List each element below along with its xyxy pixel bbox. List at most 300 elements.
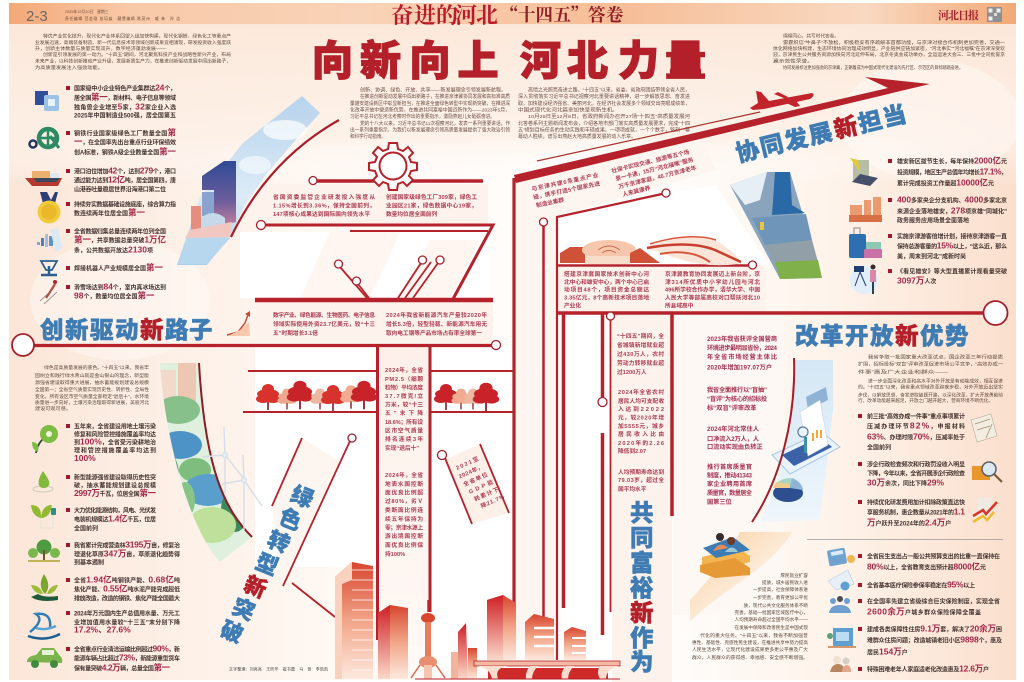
- rails around trees: [243, 371, 513, 412]
- intro paragraph: green: 质量进一步向好，土壤污染治理取得新进展，美丽河北: [35, 399, 149, 406]
- list item: disaster insurance: [858, 598, 1000, 616]
- blue heading: innovation: 创新驱动新路子: [40, 316, 212, 343]
- building C: [487, 595, 516, 660]
- list item: wind and solar: 全国前列: [74, 524, 98, 532]
- center intro paragraph: left: 习近平总书记在河北考察时作出的重要指示，激励燕赵儿女砥砺奋进。: [350, 113, 495, 120]
- icon: document and coin: [828, 570, 854, 590]
- list item: pumped storage: 2997万千瓦，位居全国第一: [74, 488, 156, 498]
- list item: pumped storage: 新型能源强省建设取得历史性突: [74, 474, 156, 482]
- rotated note: supply chain: [531, 171, 603, 210]
- series title: “十四五”答卷: [501, 2, 624, 27]
- arrow: [514, 77, 930, 183]
- text block: bidding reform: [707, 386, 768, 412]
- list item: disaster insurance: 2600余万户城乡群众保险保障全覆盖: [867, 606, 981, 616]
- icon: trees: [28, 540, 60, 562]
- center intro paragraph: right: 幕动人胜绩，谱写出燕赵大地高质量发展的动人乐章。: [518, 133, 636, 140]
- text block: digital: 五”时期增长3.1倍: [273, 329, 318, 337]
- intro paragraph: reform: 件事”惠及广大企业和群众——: [858, 368, 949, 376]
- blue heading: green (rotated): 转: [264, 526, 294, 558]
- intro paragraph: green: 全国第一；全省空气质量实现历史性、转折性、全局性: [35, 386, 149, 393]
- rotated note: social security: 人来冀康养: [622, 184, 651, 198]
- list item: enterprises: 来源企业落地雄安，278项京雄“同城化”: [897, 206, 1007, 216]
- intro paragraph: innovation: [35, 32, 231, 71]
- text block: income: 居民人均可支配收: [618, 397, 664, 405]
- list item: wind and solar: 大力优化能源结构，风电、光伏发: [74, 506, 156, 514]
- list item: clean transport: 全省重点行业清洁运输比例超过90%，新: [74, 644, 180, 654]
- list item: compute: 持续夯实数据基础设施底座，综合算力指: [74, 200, 176, 208]
- rotated note: supply chain: 制造业集群: [535, 196, 565, 209]
- list item: soil: [66, 422, 156, 463]
- blue heading: green (rotated): 突: [229, 594, 258, 625]
- rotated note: social security: 万千京津家庭，46.7万京津老年: [618, 164, 697, 191]
- icon: gears: [30, 128, 59, 149]
- red connector lines: [33, 112, 985, 660]
- city image: [730, 172, 822, 279]
- line: top innovation: [317, 179, 483, 183]
- page number: 2-3: [26, 8, 48, 25]
- list item: Xiongan: 投资规模，地区生产总值年均增长17.1%，: [897, 166, 1007, 176]
- list item: steel: 创A标准，钢铁A级企业数量全国第一: [74, 146, 176, 156]
- intro paragraph: green: 变化，所有设区市空气质量全部稳定“退后十”，水环境: [35, 393, 149, 400]
- text block: water quality: 续五年保持为: [385, 515, 423, 523]
- blue heading: green (rotated): 新: [240, 571, 270, 603]
- illustration: green landscape: [160, 363, 251, 562]
- text block: quality officer: 质量官，数量居全: [707, 489, 753, 497]
- list item: steel: 钢铁行业国家级绿色工厂数量全国第: [74, 128, 176, 138]
- center intro paragraph: left: 创新、协调、绿色、开放、共享——新发展理念引领发展新航程。: [360, 86, 506, 94]
- icon: gear: [369, 143, 417, 190]
- rotated note: supply chain: 链，携手打造5个国家先进: [533, 179, 601, 201]
- text block: business environment: 2020年增加197.07万户: [707, 364, 772, 372]
- blue heading: green (rotated): 型: [252, 549, 282, 580]
- intro paragraph: reform: [858, 354, 1003, 404]
- text block: air quality: 2024年，全省: [385, 366, 423, 374]
- line: lower innovation bar: [255, 298, 493, 302]
- list item: welding robots: 焊接机器人产业规模居全国第一: [74, 262, 164, 272]
- text block: education: 京津冀教育协同发展迈上新台阶，京: [665, 270, 760, 278]
- arc: reform: [752, 358, 794, 522]
- text block: employment: 省城镇新增就业超: [617, 341, 664, 349]
- arc: green: [199, 363, 252, 537]
- text block: business environment: 年全省市场经营主体比: [707, 353, 777, 361]
- small towers: [451, 623, 477, 679]
- icon: housing: [827, 628, 856, 647]
- text block: employment: 过1200万人: [617, 368, 647, 376]
- blue heading: prosperity: 共同富裕 新 作为: [630, 500, 654, 675]
- paragraph: livelihood: 一步提高，社会保障体系进: [753, 586, 808, 593]
- icon: leaf in hand: [31, 574, 58, 601]
- paragraph: livelihood: 一步完善，教育更加公平优: [753, 594, 808, 601]
- books: [700, 533, 750, 578]
- text block: population: [707, 425, 763, 451]
- intro paragraph: coordination: [773, 32, 1005, 71]
- list item: live streaming: 3097万人次: [897, 276, 936, 286]
- illustration: orange fan and books: [690, 532, 792, 622]
- blue heading: green (rotated): 色: [275, 504, 305, 535]
- icon: airplane: [750, 91, 814, 110]
- text block: employment: [617, 332, 664, 376]
- center intro paragraph: left: 在推进创新驱动发展中闯出新路子，在推进京津冀协同发展和高标准高质: [360, 93, 510, 100]
- list item: soil: 到100%，全省受污染耕地治: [74, 436, 156, 446]
- illustration: reform blue panel: [760, 360, 840, 522]
- list item: public spending: 全省民生支出占一般公共预算支出的比重一直保持在: [867, 552, 1000, 560]
- text block: quality officer: 推行首席质量官: [707, 463, 752, 471]
- text block: rail research: 产业化: [564, 302, 581, 310]
- wind turbines: [202, 427, 262, 530]
- text block: digital: 数字产业、绿色能源、生物医药、电子信息: [273, 311, 375, 319]
- QR code: [987, 7, 1002, 22]
- list item: one thing: 63%、办理时限70%，压减率处于: [867, 432, 965, 442]
- text block: life expectancy: 人均预期寿命达到: [618, 468, 664, 476]
- bullet list: livelihood: [858, 552, 1002, 674]
- paragraph: livelihood: 惠性、基础性、兜底性民生建设，在推进共享中努力提高: [692, 639, 808, 646]
- text block: quality officer: 制度，推动41343: [707, 472, 753, 480]
- list item: disaster insurance: 在全国率先建立省级综合巨灾保险制度，实现全省: [867, 598, 1000, 606]
- columns: prosperity section: [564, 313, 672, 635]
- note: energy intensity: 2024年，: [457, 463, 484, 480]
- series title: [391, 0, 624, 30]
- list item: ultra low emission: 焦化产能、0.55亿吨水泥产能完成超低: [74, 584, 180, 594]
- columns: green section: [378, 345, 430, 640]
- date and editor line: 责任编辑 范金刚 张培淼 藏赞编辑 陈茂州 威 林 孙 洁: [65, 16, 180, 21]
- icon: wave: [28, 614, 60, 639]
- list item: steel: [66, 128, 176, 156]
- intro paragraph: green: [35, 364, 149, 412]
- document: [800, 400, 828, 456]
- center intro paragraph: right: 取，加快建设经济强省、美丽河北，在经济社会发展多个领域交出亮眼成绩单，: [518, 100, 690, 107]
- building B: [378, 605, 408, 679]
- lines: circuit traces: [340, 262, 438, 298]
- rail under train: [558, 264, 748, 267]
- illustration: sky and number one: [177, 96, 320, 265]
- text block: EV: [386, 311, 487, 337]
- icon: orange skyline: [849, 197, 882, 222]
- text block: digital: [273, 311, 375, 337]
- list item: ski: 98个，数量均位居全国第一: [74, 290, 155, 300]
- list item: compute: [66, 200, 176, 218]
- rotated note: social security: 景一卡通，15万“河北福嘱”服务: [615, 156, 694, 183]
- icon: chip: [35, 91, 59, 111]
- list item: enterprises: 400多家央企分支机构、4000多家北京: [897, 194, 1007, 204]
- paragraph: livelihood: 人均预期寿命超过全国平均水平——: [734, 616, 808, 623]
- list item: one thing: [858, 412, 965, 452]
- text block: air quality: [385, 366, 423, 452]
- text block: air quality: 实现“退后十”: [385, 444, 419, 452]
- note: energy intensity: 2021至: [455, 456, 480, 472]
- list item: steel: 一，在全国率先出台重点行业环保绩效: [74, 136, 176, 146]
- connector rings: [12, 176, 1008, 460]
- list item: public spending: 80%以上，全省教育支出预计超8000亿元: [867, 562, 986, 572]
- intro paragraph: coordination: 冀示范性荣誉。: [773, 58, 813, 64]
- thin column: [610, 320, 612, 612]
- intro paragraph: innovation: 升，创新主体数量与质量实现双升，数字经济蓬勃发展——: [35, 45, 166, 52]
- list item: medical insurance: 全省基本医疗保险参保率稳定在95%以上: [867, 580, 975, 590]
- center intro paragraph: left: 和科学行动指南。: [350, 133, 386, 140]
- vertical trunk: [512, 178, 516, 603]
- list item: inspection: [858, 460, 965, 488]
- text block: life expectancy: 79.03岁，超过全: [618, 476, 664, 484]
- vertical second: [542, 226, 545, 618]
- list item: housing: 居民154万户: [867, 646, 908, 656]
- center intro paragraph: right: 10月29日至12月8日，省政府新闻办召开27场“十四五”高质量发展河: [528, 113, 690, 120]
- station: [560, 240, 660, 264]
- center intro paragraph: right: 深入贯彻落实习近平总书记视察河北重要讲话精神，进一步解放思想、奋发进: [518, 93, 690, 100]
- text block: water quality: 地表水国控断: [385, 480, 423, 488]
- note: energy intensity: 降21.7%: [479, 493, 505, 510]
- center intro paragraph: right: 五”规划目标任务的生动实践和丰硕成果。一项项成就，一个个数字，铭刻一幕: [518, 126, 690, 134]
- icon row: lower-center trees: [434, 383, 499, 411]
- newspaper logo: 河北日报: [938, 7, 979, 23]
- text block: water quality: 过80%，劣Ⅴ: [385, 497, 423, 505]
- list item: R and D: 享服务机制，惠企数量从2021年的1.1: [867, 506, 965, 516]
- list item: ports: 山港吞吐量稳居世界沿海港口第二位: [74, 186, 166, 194]
- intro paragraph: green: 源强省建设取得重大进展，抽水蓄能规划建设总规模: [35, 379, 149, 386]
- note: energy intensity: GDP能: [467, 478, 495, 496]
- icon: medal: [38, 192, 60, 224]
- center intro paragraph: left: 出一系列重要指示，为我们以新发展理念引领高质量发展提供了强大政治引领: [350, 126, 510, 134]
- list item: water: [66, 610, 180, 634]
- text block: air quality: 方米，较“十三: [385, 400, 423, 408]
- line: thin inner: [350, 230, 488, 232]
- illustration: station and train: [560, 237, 741, 265]
- text block: rail research: 北中心和雄安中心，两个中心已启: [564, 278, 649, 286]
- intro paragraph: innovation: 未来产业，以科技创新推动产业升级，发展新质生产力，在推进创新驱动发展中阔出新路子，: [35, 58, 231, 64]
- text block: water quality: 2024年，全省: [385, 471, 423, 479]
- panel: pale center frames: [240, 136, 784, 682]
- center intro paragraph: left: 化改革开放中塑造新优势，在推进共同富裕中国迈新作为——2023年5月，: [350, 106, 510, 114]
- list item: housing: 难群众住房问题；改造城镇老旧小区9898个，惠及: [867, 634, 1002, 644]
- paragraph: livelihood: [692, 572, 808, 661]
- list item: live streaming: 《看见雄安》等大型直播累计观看量突破: [897, 268, 1007, 276]
- list item: specialty clusters: 国家级中小企业特色产业集群达24个，: [74, 82, 176, 92]
- list item: housing: 建成各类保障性住房9.1万套，解决了20余万困: [867, 624, 1002, 634]
- list item: elderly: 特殊困难老年人家庭适老化改造惠及12.6万户: [867, 664, 989, 674]
- rotated note: social security: 社保卡实现交通、旅游等五个场: [611, 148, 690, 175]
- bullet list: reform: [858, 412, 965, 528]
- text block: income: [618, 388, 664, 455]
- text block: education: 人民大学等部属高校对口帮扶河北10: [665, 294, 760, 302]
- text block: life expectancy: 国平均水平: [618, 485, 647, 493]
- text block: bidding reform: 我省全面推行以“盲抽”: [707, 386, 767, 394]
- icon: flower plant: [32, 425, 58, 453]
- paragraph: livelihood: 人民生活水平，让现代化建设成果更多更公平惠及广大: [692, 646, 808, 653]
- list item: data: 全省数据归集总量连续两年位列全国: [74, 228, 166, 236]
- text block: income: 元，较2020年增: [618, 414, 664, 422]
- list item: forests: 我省累计完成营造林3195万亩，修复治: [74, 540, 180, 550]
- text block: air quality: 五”末下降: [385, 409, 423, 417]
- text block: income: 降低到2.07: [618, 447, 646, 455]
- text block: income: 入达到22022: [618, 405, 664, 413]
- icon: calculator: [827, 548, 855, 566]
- note rails: [445, 444, 509, 524]
- intro paragraph: coordination: 体化网络加快构建，生态环境协同治理成效明显，产业链供应链加紧密，“河北事实”“河北福嘱”在京津深受欢: [773, 45, 1005, 52]
- text block: digital: 领域实际使用外资23.7亿美元，较“十三: [273, 320, 375, 328]
- phone platform: [772, 432, 840, 474]
- blue heading: coordination: 协同发展新担当: [733, 100, 909, 167]
- intro paragraph: green: 建设可观可感。: [35, 405, 71, 412]
- building A: [335, 562, 373, 679]
- list item: water: 业增加值用水量较“十三五”末分别下降: [74, 618, 180, 626]
- center intro paragraph: left: 党的十八大以来，习近平总书记11次视察河北，发表一系列重要讲话，作: [360, 120, 510, 127]
- paragraph: livelihood: 完善。基础一批国家区域医疗中心，: [734, 609, 808, 616]
- list item: inspection: 涉企行政检查频次和行政罚没收入明显: [867, 460, 965, 468]
- list item: tourism: 保持总游客量的15%以上，“这么近，那么: [897, 240, 1007, 250]
- vertical third with diagonal: [557, 194, 662, 660]
- list item: enterprises: [888, 194, 1007, 224]
- line: mid innovation: [266, 225, 493, 299]
- text block: air quality: PM2.5（细颗: [385, 375, 423, 383]
- list item: housing: [858, 624, 1002, 656]
- list item: soil: 理和管控措施覆盖率均达到: [74, 446, 156, 454]
- list item: clean transport: [66, 644, 180, 672]
- text block: income: 加5555元，城乡: [618, 422, 664, 430]
- list item: soil: 五年来，全省建设用地土壤污染: [74, 422, 156, 430]
- text block: life expectancy: [618, 468, 664, 493]
- icon: green car: [27, 648, 62, 668]
- text block: population: 口流动实现由负转正: [707, 443, 763, 451]
- text block: green factories: 数量均位居全国前列: [386, 210, 437, 218]
- text block: bidding reform: 标“双盲”评审改革: [707, 404, 756, 412]
- building D: [525, 614, 554, 660]
- intro paragraph: innovation: 业发展迅速，高端装备制造、新一代信息技术等领域创新成果竞相涌现，研发投资收入强度跃: [35, 39, 231, 46]
- icon: ship: [25, 171, 62, 186]
- text block: business environment: [707, 335, 778, 372]
- text block: air quality: 粒物）平均浓度: [385, 384, 423, 392]
- text block: rail research: [564, 270, 649, 310]
- list item: pumped storage: [66, 474, 156, 498]
- text block: education: 496所学校合作办学，清华大学、中国: [665, 286, 760, 294]
- intro paragraph: innovation: 特优产业优化提升，现代化产业体系回望入组加快构建，现代化钢铁、绿色化工等重点产: [43, 32, 231, 40]
- list item: data: [66, 228, 166, 254]
- list item: forests: 理退化草原347万亩，草原退化趋势得: [74, 548, 180, 558]
- list item: specialty clusters: [66, 82, 176, 120]
- text block: education: 津314所优质中小学幼儿园与河北: [665, 278, 760, 286]
- intro paragraph: reform: 的。“十四五”以来，我省重点领域改革蹄疾步稳，对外开放迈出坚实: [858, 384, 1003, 390]
- text block: EV: 增长5.3倍，轻型轻载、新能源汽车用无: [386, 320, 487, 328]
- intro paragraph: reform: 进一步全面深化改革和高水平对外开放是有动能成效，相互促进: [868, 378, 1003, 384]
- icon: leaf and plug: [31, 505, 56, 528]
- list item: inspection: 30万余次，同比下降29%: [867, 478, 944, 488]
- icon: data chart: [37, 228, 62, 252]
- rail to the right circle: [558, 311, 985, 315]
- list item: R and D: [858, 498, 965, 528]
- note: energy intensity: 耗累计下: [473, 485, 500, 503]
- icon: luggage: [849, 228, 882, 258]
- blue heading: green (rotated): 绿: [287, 481, 317, 513]
- text block: EV: 取向电工钢等产品市场占有率全球第一: [386, 329, 482, 337]
- rotated note: supply chain: 与京津共建6条重点产业: [531, 171, 599, 193]
- list item: ski: 滑雪场达到84个，室内真冰场达到: [74, 282, 166, 292]
- icon: people: [829, 596, 851, 613]
- text block: rail research: 动项目48个，项目资金总额达: [564, 286, 649, 294]
- list item: water: 17.2%、27.6%: [74, 624, 131, 634]
- text block: air quality: 区市空气质量: [385, 426, 423, 434]
- list item: ultra low emission: [66, 574, 180, 602]
- list item: water: 2024年万元国内生产总值用水量、万元工: [74, 610, 180, 618]
- text block: income: 2020年的2.26: [618, 439, 664, 447]
- list item: specialty clusters: 独角兽企业增至5家，32家企业入选: [74, 102, 176, 112]
- intro paragraph: innovation: 为高质量发展注入强劲动能。: [35, 64, 103, 71]
- list item: inspection: 下降，今年以来，全省开展涉企行政检查: [867, 470, 965, 478]
- paragraph: livelihood: 在发展中保障和改善民生是中国式现: [734, 624, 808, 631]
- text block: water quality: 面优良比例保: [385, 541, 423, 549]
- icon: elderly couple: [830, 656, 851, 672]
- text block: bidding reform: “盲评”为核心的招标投: [707, 395, 768, 403]
- paragraph: livelihood: 代化的重大任务。“十四五”以来，我省不断加强普: [700, 632, 808, 639]
- list item: clean transport: 保有量突破4.2万辆，总量全国第一: [74, 662, 170, 672]
- text block: employment: “十四五”期间，全: [617, 332, 664, 340]
- list item: Xiongan: 累计完成投资工作量超10000亿元: [897, 178, 994, 188]
- TV tower: [411, 600, 445, 679]
- blue heading: reform: 改革开放新优势: [795, 322, 969, 349]
- text block: green factories: [386, 193, 477, 218]
- list item: live streaming: [888, 268, 1007, 286]
- list item: pumped storage: 破，抽水蓄能规划建设总规模: [74, 482, 156, 490]
- arc: innovation: [231, 120, 339, 237]
- date and editor line: [65, 9, 180, 21]
- intro paragraph: coordination: 迎，京津民生公共服务资源加快向河北延伸布局，北京冬奥会成功举办，全运运进大会三、三批中企司批誉京: [773, 51, 1005, 58]
- list item: ports: 港口泊位增加42个，达到279个，港口: [74, 166, 176, 176]
- text block: green factories: 创建国家级绿色工厂309家，绿色工: [386, 193, 477, 201]
- list item: Xiongan: 雄安新区拔节生长，每年保持2000亿元: [897, 156, 1007, 166]
- icon: rising chart: [973, 498, 997, 522]
- intro paragraph: coordination: 协同发展标注更加强劲的京津冀，正朝着成为中国式现代化建设的先行区、示范区的目标踏踏奋进。: [783, 64, 963, 71]
- text block: business environment: 2023年我省获评全国营商: [707, 335, 777, 343]
- center intro paragraph: right: 中国式现代化河北篇章加快呈现新生机。: [518, 106, 618, 114]
- list item: ultra low emission: 排放改造，改造的钢铁、焦化产能全国最大: [74, 594, 180, 602]
- note: energy intensity: [454, 452, 505, 513]
- list item: forests: 到基本遏制: [74, 558, 104, 566]
- list item: one thing: 全国前列: [867, 444, 891, 452]
- list item: data: 条，公共数据开放达2130项: [74, 244, 153, 254]
- intro paragraph: green: 绿色是高质量发展的底色。“十四五”以来，我省牢: [44, 364, 149, 371]
- text block: air quality: 37.7微克/立: [385, 392, 423, 400]
- paragraph: livelihood: 厚民就业扩容: [780, 572, 808, 579]
- intro paragraph: reform: 行，改革动能越来越足，开放之门越开越大，营商环境不断优化。: [858, 397, 993, 404]
- thin accent over arrow: [537, 112, 760, 161]
- text block: employment: 劳动力转移就业超: [617, 359, 664, 367]
- intro paragraph: reform: 我省争取一批国家重大改革试点，国企改革三年行动提质: [868, 354, 1003, 360]
- paragraph: livelihood: 质，现代公共文化服务体系不断: [744, 602, 808, 609]
- text block: income: 居民收入比由: [618, 430, 664, 438]
- intro paragraph: coordination: 雷霆织信“牛鼻子”不放松，积极稳妥有序疏解非首都功能，与京津对接合作机制更加完善，交通一: [783, 39, 1005, 46]
- text block: population: 口净流入2万人，人: [707, 435, 760, 443]
- text block: rail research: 3.35亿元，8个高新技术项目落地: [564, 294, 649, 302]
- rotated note: social security: [611, 147, 699, 200]
- paragraph: livelihood: 群众，人民群众的获得感、幸福感、安全感不断增强。: [692, 654, 808, 661]
- list item: specialty clusters: 2025年中国制造业500强，居全国第五: [74, 112, 176, 120]
- icon: robot arm: [41, 261, 57, 275]
- list item: ports: 通过能力达到12亿吨，居全国第四，唐: [74, 174, 176, 184]
- date and editor line: 2025年12月10日 星期三: [65, 9, 109, 14]
- icon: camera operator: [850, 264, 878, 294]
- numeral one: [202, 161, 236, 228]
- text block: EV: 2024年我省新能源汽车产量较2020年: [386, 311, 487, 319]
- note: energy intensity: 全省单位: [462, 470, 489, 488]
- list item: one thing: 压减办理环节82%，申报材料: [867, 420, 965, 430]
- list item: forests: [66, 540, 180, 566]
- text block: steel green factories: 1.15%增长到3.36%，保持全国前列，: [273, 202, 375, 210]
- list item: ports: [66, 166, 176, 194]
- icon: water drop: [33, 471, 53, 492]
- credits: 文字整理：刘亮亮 王昕华 崔书雷 马 哲 李凯凯: [229, 666, 328, 672]
- green section slanted rails: [272, 438, 350, 617]
- text block: water quality: 持100%: [385, 550, 405, 558]
- list item: tourism: 实施京津游客倍增计划，接待京津游客一直: [897, 232, 1007, 240]
- main title: 向新向上河北力量: [312, 38, 706, 84]
- building E: [564, 627, 586, 660]
- text block: quality officer: 家企业聘用首席: [707, 480, 752, 488]
